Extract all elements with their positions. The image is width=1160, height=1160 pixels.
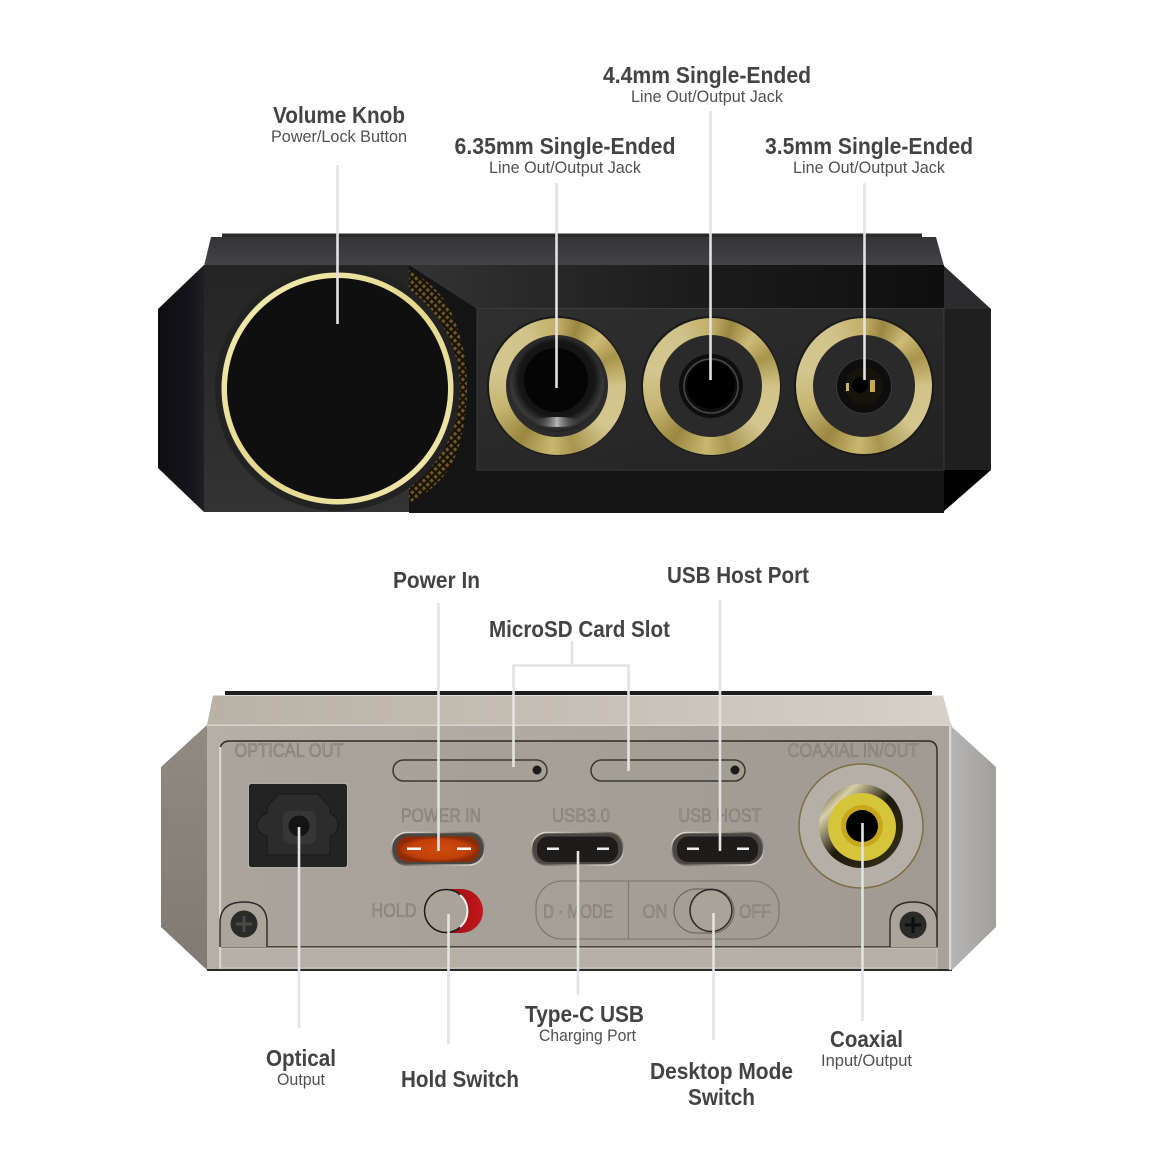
hold switch: HOLD bbox=[372, 901, 416, 922]
top edge strip bbox=[222, 234, 922, 238]
right side panel bbox=[944, 309, 991, 470]
outer face frame bbox=[207, 725, 952, 971]
main port panel bbox=[477, 308, 944, 470]
callout: Desktop Mode Switch: Switch bbox=[688, 1084, 755, 1110]
callout: 4.4mm Single-Ended: 4.4mm Single-Ended bbox=[603, 62, 811, 88]
optical port bbox=[248, 784, 348, 868]
callout: 3.5mm Single-Ended bbox=[765, 133, 973, 380]
callout: 6.35mm Single-Ended: Line Out/Output Jack bbox=[489, 159, 642, 177]
callout: Coaxial bbox=[821, 823, 912, 1070]
USB host port bbox=[672, 832, 764, 865]
label: power in: POWER IN bbox=[401, 806, 481, 827]
callout: Optical: Output bbox=[277, 1071, 325, 1089]
6.35mm jack bbox=[487, 316, 627, 456]
callout: Volume Knob: Power/Lock Button bbox=[271, 128, 407, 146]
callout: 6.35mm Single-Ended bbox=[454, 133, 676, 388]
3.5mm jack bbox=[794, 316, 934, 456]
desktop mode switch: ON bbox=[642, 902, 668, 923]
recessed inner panel bbox=[220, 741, 937, 970]
coaxial RCA port bbox=[799, 764, 923, 888]
callout: USB Host Port: USB Host Port bbox=[667, 562, 809, 588]
callout: Optical: Optical bbox=[266, 1045, 336, 1071]
desktop mode switch: OFF bbox=[739, 902, 771, 923]
screw right bbox=[890, 902, 937, 947]
right side bevel bbox=[952, 727, 996, 970]
top device: headphone amplifier front panel bbox=[158, 234, 991, 513]
screw left bbox=[220, 902, 267, 947]
lower band bbox=[409, 470, 944, 513]
label: optical out: OPTICAL OUT bbox=[234, 741, 344, 762]
callout: 4.4mm Single-Ended bbox=[603, 62, 811, 380]
callout: Optical bbox=[266, 827, 336, 1089]
callout: Power In: Power In bbox=[393, 567, 480, 593]
left knob housing bbox=[204, 265, 409, 512]
knurled wheel edge bbox=[409, 270, 467, 503]
bottom device: rear panel bbox=[161, 691, 996, 971]
callout: Hold Switch: Hold Switch bbox=[401, 1066, 519, 1092]
callout: Volume Knob: Volume Knob bbox=[273, 102, 405, 128]
bottom lip bbox=[221, 948, 937, 968]
callout: 3.5mm Single-Ended: 3.5mm Single-Ended bbox=[765, 133, 973, 159]
callout: Volume Knob bbox=[271, 102, 407, 324]
label: coaxial in/out: COAXIAL IN/OUT bbox=[788, 741, 919, 762]
volume knob bbox=[215, 266, 460, 511]
right side lower bevel bbox=[943, 470, 991, 512]
callout: Type-C USB bbox=[525, 851, 644, 1045]
callout: Type-C USB: Charging Port bbox=[539, 1027, 636, 1045]
callout: Coaxial: Coaxial bbox=[830, 1026, 903, 1052]
label: USB host: USB HOST bbox=[678, 806, 762, 827]
desktop mode switch: D · MODE bbox=[543, 902, 613, 923]
upper band bbox=[409, 265, 944, 309]
power in port bbox=[392, 832, 484, 865]
microSD slot left bbox=[393, 760, 547, 781]
top bevel face bbox=[207, 696, 951, 725]
callout: Desktop Mode Switch: Desktop Mode bbox=[650, 1058, 793, 1084]
callout: Desktop Mode Switch bbox=[650, 913, 793, 1110]
left side bevel bbox=[161, 725, 207, 970]
hold switch bbox=[372, 889, 483, 933]
callout: 3.5mm Single-Ended: Line Out/Output Jack bbox=[793, 159, 946, 177]
desktop mode switch bbox=[536, 881, 779, 939]
callout: 4.4mm Single-Ended: Line Out/Output Jack bbox=[631, 88, 784, 106]
label: USB3.0: USB3.0 bbox=[552, 806, 610, 827]
microSD slot right bbox=[591, 760, 745, 781]
USB3.0 port bbox=[532, 832, 624, 865]
callout: MicroSD Card Slot: MicroSD Card Slot bbox=[489, 616, 670, 642]
callout: Coaxial: Input/Output bbox=[821, 1052, 912, 1070]
knob recess bbox=[409, 265, 477, 512]
callout: Type-C USB: Type-C USB bbox=[525, 1001, 644, 1027]
4.4mm jack bbox=[641, 316, 781, 456]
callout: MicroSD Card Slot bbox=[489, 616, 670, 771]
top edge strip bbox=[225, 691, 932, 695]
top bevel face bbox=[204, 237, 944, 266]
callout: 6.35mm Single-Ended: 6.35mm Single-Ended bbox=[454, 133, 676, 159]
right side upper bevel bbox=[943, 265, 991, 309]
left side bevel bbox=[158, 265, 204, 512]
